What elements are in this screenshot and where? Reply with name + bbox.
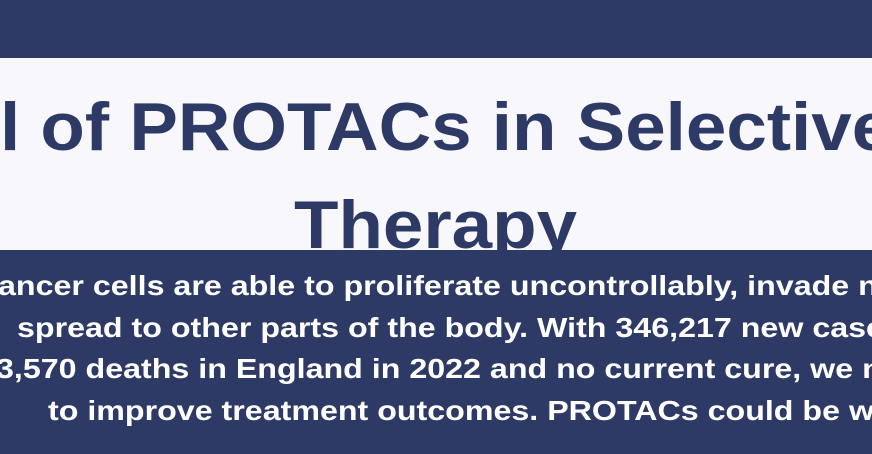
text block: intro: ancer cells are able to proliferate uncontrollably, invade n — [0, 270, 872, 301]
text block: intro: spread to other parts of the body. With 346,217 new case — [17, 312, 872, 343]
text block: intro: to improve treatment outcomes. PROTACs could be w — [48, 395, 872, 426]
title line 1: l of PROTACs in Selective — [0, 89, 872, 165]
text block: intro — [0, 270, 872, 426]
panel: title background — [0, 58, 872, 250]
text block: intro: 3,570 deaths in England in 2022 and no current cure, we n — [0, 353, 872, 384]
